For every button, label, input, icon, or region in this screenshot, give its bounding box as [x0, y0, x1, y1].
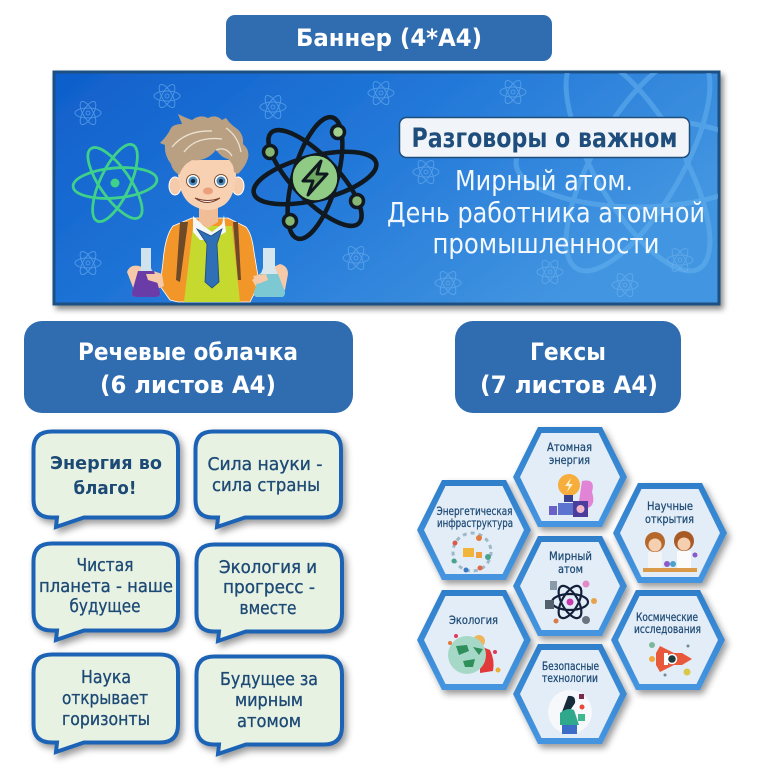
- speech bubble 5: Наука: [81, 667, 131, 688]
- speech bubble 4: вместе: [240, 598, 296, 619]
- hex: space research: Космические: [636, 610, 698, 624]
- hex: scientific discoveries: [613, 483, 727, 583]
- speech bubble 4: прогресс -: [223, 577, 315, 598]
- icon: atom with science items: [545, 580, 597, 624]
- tie: [197, 229, 222, 288]
- banner subtitle: [387, 164, 705, 260]
- hex: atomic energy: Атомная: [547, 440, 592, 454]
- speech bubble 6: атомом: [237, 711, 301, 732]
- icon: black atom with lightning: [249, 111, 381, 245]
- right fingers: [253, 274, 268, 284]
- jacket: [160, 218, 258, 302]
- speech bubble 5: горизонты: [62, 709, 150, 730]
- label: talks about important: Разговоры о важном: [412, 123, 678, 154]
- speech bubble 6: мирным: [235, 690, 303, 711]
- left flask: [132, 248, 160, 297]
- right flask: [254, 248, 285, 297]
- hex: scientific discoveries: открытия: [645, 512, 694, 526]
- icon: person hugging the globe: [448, 634, 500, 674]
- speech bubble 3: будущее: [70, 596, 140, 617]
- icon: green atom: [72, 139, 158, 227]
- hex: energy infrastructure: инфраструктура: [437, 516, 513, 530]
- speech bubble 6: [196, 656, 342, 754]
- icon: two kids in a lab: [643, 531, 698, 572]
- hex: atomic energy: [513, 427, 627, 527]
- speech bubble 2: сила страны: [212, 475, 320, 496]
- speech bubble 5: [34, 654, 178, 752]
- eyes: [186, 174, 228, 188]
- heading: hexes: Гексы: [530, 338, 606, 366]
- hex: energy infrastructure: [417, 480, 531, 580]
- collar: [193, 215, 226, 240]
- hex: peaceful atom: [513, 536, 627, 636]
- hex: energy infrastructure: Энергетическая: [436, 504, 512, 518]
- hex: safe technologies: технологии: [542, 671, 598, 685]
- hex: safe technologies: [513, 644, 627, 744]
- heading: hexes: [455, 321, 681, 413]
- banner subtitle: День работника атомной: [387, 196, 705, 229]
- title: banner heading: Баннер (4*А4): [296, 24, 482, 52]
- hex: ecology: [417, 590, 531, 690]
- hex: peaceful atom: Мирный: [549, 549, 592, 563]
- icon: rocket: [649, 642, 692, 676]
- icon: lightbulb and barrel: [549, 474, 593, 517]
- speech bubble 5: открывает: [62, 688, 148, 709]
- heading: speech bubbles: Речевые облачка: [78, 338, 298, 366]
- banner subtitle: Мирный атом.: [455, 164, 633, 197]
- heading: speech bubbles: (6 листов А4): [100, 371, 276, 399]
- icon: person with gadgets: [548, 690, 592, 734]
- hex: ecology: Экология: [449, 613, 498, 627]
- speech bubble 2: Сила науки -: [208, 454, 322, 475]
- speech bubble 4: [196, 544, 342, 641]
- speech bubble 3: Чистая: [76, 555, 134, 576]
- hex: scientific discoveries: Научные: [647, 499, 693, 513]
- speech bubble 3: [34, 544, 178, 640]
- speech bubble 1: Энергия во: [50, 453, 162, 474]
- speech bubble 1: благо!: [74, 478, 136, 499]
- illustration: boy with flasks: [127, 114, 288, 302]
- face: [178, 160, 236, 210]
- mouth: [195, 198, 220, 202]
- speech bubble 4: Экология и: [219, 557, 317, 578]
- background: small atoms: [75, 78, 693, 299]
- speech bubble 2: [196, 432, 341, 527]
- ears: [169, 177, 181, 195]
- hex: safe technologies: Безопасные: [542, 659, 599, 673]
- background: large faint atom: [514, 73, 718, 274]
- icon: ring of infrastructure items: [452, 533, 491, 572]
- left hand behind flask: [127, 266, 164, 292]
- hex: atomic energy: энергия: [549, 453, 590, 467]
- heading: hexes: (7 листов А4): [480, 371, 658, 399]
- nose: [203, 188, 213, 194]
- speech bubble 1: [34, 432, 178, 527]
- right hand behind flask: [252, 264, 288, 294]
- neck: [199, 205, 218, 228]
- heading: speech bubbles: [24, 321, 353, 413]
- banner subtitle: промышленности: [432, 227, 660, 260]
- label: talks about important: [400, 118, 690, 158]
- hex: space research: [611, 590, 725, 690]
- hex: space research: исследования: [634, 622, 701, 636]
- hex: peaceful atom: атом: [558, 562, 583, 576]
- hair: [160, 114, 248, 175]
- panel: banner: [52, 70, 728, 314]
- left fingers: [146, 274, 161, 283]
- speech bubble 6: Будущее за: [220, 669, 318, 690]
- speech bubble 3: планета - наше: [39, 576, 173, 597]
- vest: [184, 226, 240, 302]
- title: banner heading: [226, 15, 552, 61]
